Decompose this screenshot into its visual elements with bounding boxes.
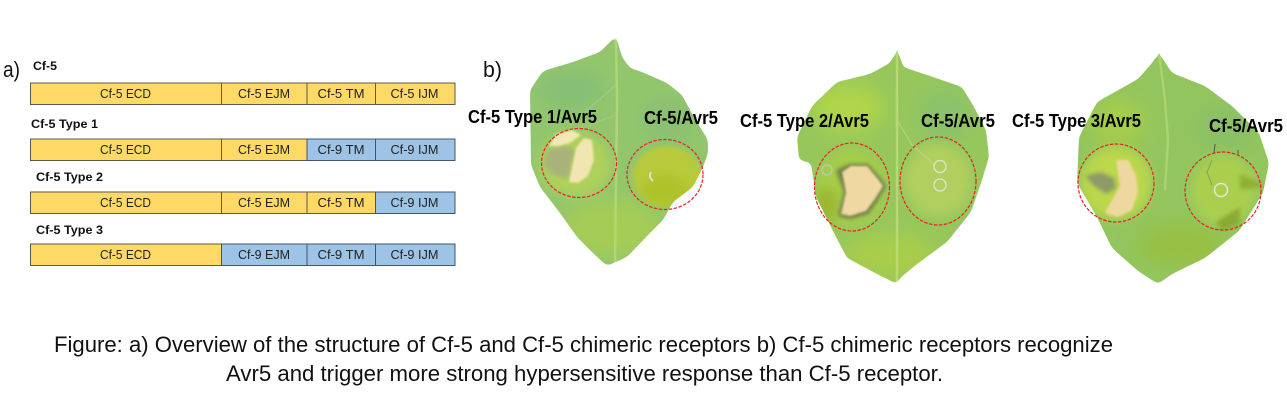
construct bar: Cf-5: Cf-5 ECD (100, 86, 151, 101)
construct bar: Cf-5 Type 3: Cf-5 ECD (100, 247, 151, 262)
heading: Cf-5 Type 1: Cf-5 Type 1 (31, 117, 98, 131)
leaf label: Cf-5 Type 2/Avr5: Cf-5 Type 2/Avr5 (740, 111, 869, 131)
construct bar: Cf-5: Cf-5 TM (318, 86, 364, 101)
heading: Cf-5 Type 3: Cf-5 Type 3 (36, 223, 103, 237)
leaf label: Cf-5/Avr5 middle leaf: Cf-5/Avr5 (921, 111, 995, 131)
heading: Cf-5 Type 2: Cf-5 Type 2 (36, 170, 103, 184)
construct bar: Cf-5 Type 1 (30, 139, 455, 160)
construct bar: Cf-5 Type 2: Cf-5 EJM (238, 195, 290, 210)
construct bar: Cf-5 Type 3 (30, 244, 455, 266)
construct bar: Cf-5: Cf-5 EJM (238, 86, 290, 101)
construct bar: Cf-5 Type 1: Cf-9 IJM (390, 142, 438, 157)
construct bar: Cf-5 Type 2: Cf-9 IJM (390, 195, 438, 210)
figure caption (54, 332, 1113, 386)
construct bar: Cf-5 Type 1: Cf-5 ECD (100, 142, 151, 157)
leaf label: Cf-5/Avr5 right leaf: Cf-5/Avr5 (1209, 116, 1283, 136)
label: a): a) (3, 57, 20, 82)
panel: b) leaf assays (468, 30, 1283, 290)
figure caption: Figure: a) Overview of the structure of Cf-5 and Cf-5 chimeric receptors b) Cf-5 chimeric receptors recognize (54, 332, 1113, 357)
leaf label: Cf-5 Type 1/Avr5: Cf-5 Type 1/Avr5 (468, 107, 597, 127)
label: b): b) (483, 57, 502, 82)
construct bar: Cf-5 Type 3: Cf-9 IJM (390, 247, 438, 262)
panel: a) receptor structure overview (3, 57, 455, 266)
construct bar: Cf-5 Type 2: Cf-5 ECD (100, 195, 151, 210)
leaf label: Cf-5 Type 3/Avr5: Cf-5 Type 3/Avr5 (1012, 111, 1141, 131)
construct bar: Cf-5 Type 3: Cf-9 EJM (238, 247, 290, 262)
heading: Cf-5: Cf-5 (33, 59, 57, 73)
construct bar: Cf-5 Type 2 (30, 192, 455, 214)
figure caption: Avr5 and trigger more strong hypersensitive response than Cf-5 receptor. (226, 361, 943, 386)
leaf label: Cf-5/Avr5 left leaf: Cf-5/Avr5 (644, 108, 718, 128)
construct bar: Cf-5 (30, 83, 455, 104)
construct bar: Cf-5: Cf-5 IJM (390, 86, 438, 101)
construct bar: Cf-5 Type 2: Cf-5 TM (318, 195, 364, 210)
construct bar: Cf-5 Type 1: Cf-5 EJM (238, 142, 290, 157)
leaf 3: Cf-5 Type 3 and Cf-5 (1077, 53, 1268, 282)
leaf 1: Cf-5 Type 1 and Cf-5 (530, 38, 708, 265)
construct bar: Cf-5 Type 3: Cf-9 TM (318, 247, 364, 262)
leaf 2: Cf-5 Type 2 and Cf-5 (797, 50, 989, 282)
construct bar: Cf-5 Type 1: Cf-9 TM (318, 142, 364, 157)
